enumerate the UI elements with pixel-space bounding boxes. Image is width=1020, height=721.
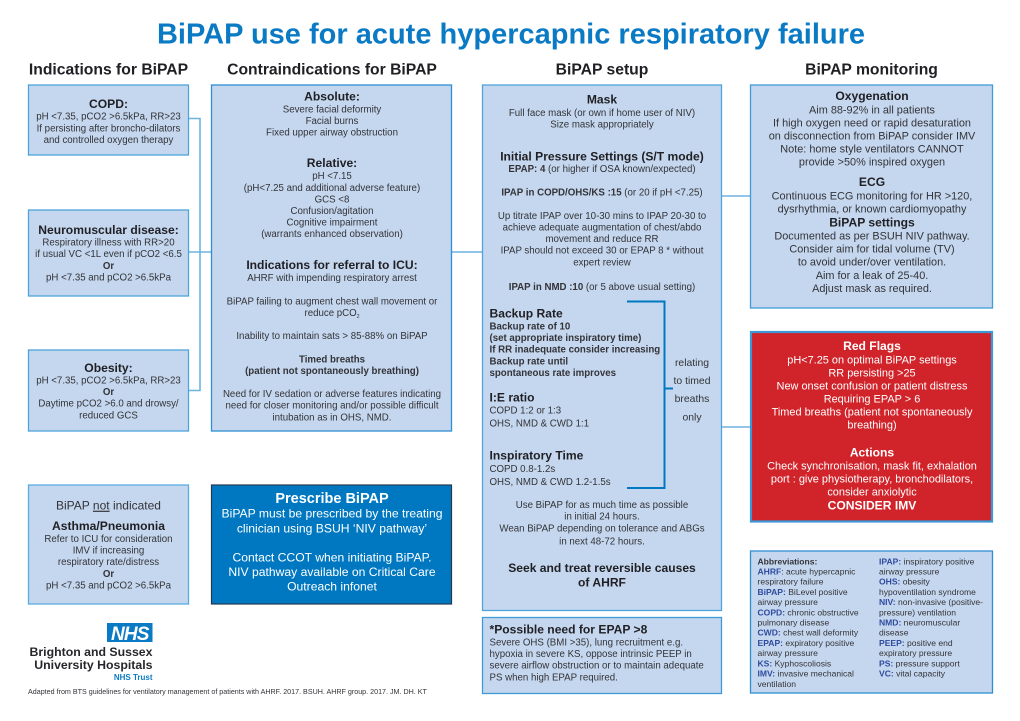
trust name	[30, 645, 153, 682]
abbreviations left column: IMV: invasive mechanical	[758, 668, 854, 678]
panel: possible need for EPAP above 8	[482, 618, 722, 694]
oxygenation: Oxygenation	[835, 89, 909, 103]
initial pressure settings: expert review	[573, 257, 632, 268]
red flags list: RR persisting >25	[828, 368, 916, 380]
initial pressure settings: IPAP in NMD :10 (or 5 above usual setting)	[509, 282, 695, 293]
asthma advice: Or	[103, 569, 114, 580]
bracket note: relating	[675, 358, 709, 369]
connector lines	[189, 118, 750, 427]
prescribe text: NIV pathway available on Critical Care	[228, 565, 436, 579]
abbreviations left column: KS: Kyphoscoliosis	[758, 658, 831, 668]
abbreviations left column: BiPAP: BiLevel positive	[758, 587, 848, 597]
abbreviations left column: COPD: chronic obstructive	[758, 607, 859, 617]
EPAP text: Severe OHS (BMI >35), lung recruitment e.g.	[490, 637, 683, 648]
relative contraindications: (warrants enhanced observation)	[261, 229, 403, 240]
neuromuscular criteria	[35, 238, 182, 284]
duration advice	[499, 500, 705, 547]
asthma heading: Asthma/Pneumonia	[52, 519, 165, 533]
mask settings: Full face mask (or own if home user of NIV)	[509, 108, 695, 119]
initial pressure settings: IPAP should not exceed 30 or EPAP 8 * without	[501, 246, 704, 257]
relative contraindications	[244, 156, 420, 240]
neuromuscular criteria: Respiratory illness with RR>20	[42, 238, 175, 249]
not indicated heading: BiPAP not indicated	[56, 499, 161, 513]
abbreviations right column: disease	[879, 628, 909, 638]
abbreviations left column: ventilation	[758, 679, 796, 689]
inspiratory time	[490, 449, 611, 488]
prescribe text: clinician using BSUH ‘NIV pathway’	[237, 521, 427, 535]
abbreviations right column: PEEP: positive end	[879, 638, 953, 648]
ICU referral indications: Indications for referral to ICU:	[246, 258, 418, 272]
I:E ratio: COPD 1:2 or 1:3	[490, 406, 561, 417]
mask settings: Size mask appropriately	[550, 120, 654, 131]
ICU referral indications: Timed breaths	[299, 354, 365, 366]
neuromuscular heading: Neuromuscular disease:	[38, 223, 179, 237]
ICU referral indications: Need for IV sedation or adverse features indicating	[223, 389, 441, 400]
abbreviations right column: OHS: obesity	[879, 577, 931, 587]
ICU referral indications: 2	[357, 314, 360, 320]
obesity criteria: pH <7.35, pCO2 >6.5kPa, RR>23	[36, 376, 181, 386]
asthma advice: pH <7.35 and pCO2 >6.5kPa	[46, 580, 172, 592]
duration advice: Wean BiPAP depending on tolerance and ABGs	[499, 523, 705, 534]
abbreviations left column: AHRF: acute hypercapnic	[758, 566, 856, 576]
abbreviations left column: airway pressure	[758, 597, 818, 607]
panel: COPD	[28, 85, 188, 155]
obesity heading: Obesity:	[84, 361, 133, 375]
relative contraindications: GCS <8	[315, 194, 349, 206]
relative contraindications: Relative:	[307, 156, 357, 170]
ICU referral indications: AHRF with impending respiratory arrest	[247, 273, 417, 284]
red flags list: Timed breaths (patient not spontaneously	[772, 407, 973, 419]
initial pressure settings: IPAP in COPD/OHS/KS :15 (or 20 if pH <7.25)	[501, 188, 703, 199]
actions list: consider anxiolytic	[827, 486, 917, 498]
asthma advice: respiratory rate/distress	[58, 557, 159, 568]
ECG: dysrhythmia, or known cardiomyopathy	[778, 203, 967, 215]
heading: indications: Indications for BiPAP	[29, 62, 188, 78]
COPD criteria	[36, 112, 181, 146]
source note: Adapted from BTS guidelines for ventilatory management of patients with AHRF. 2017. BSUH. AHRF group. 2017. JM. DH. KT	[28, 688, 428, 696]
abbreviations left column: respiratory failure	[758, 577, 824, 587]
prescribe text: Contact CCOT when initiating BiPAP.	[232, 550, 432, 564]
abbreviations right column: VC: vital capacity	[879, 668, 946, 678]
red flags list: pH<7.25 on optimal BiPAP settings	[787, 354, 957, 366]
EPAP text	[490, 637, 704, 683]
mask settings	[509, 93, 695, 131]
obesity criteria: Daytime pCO2 >6.0 and drowsy/	[38, 399, 179, 410]
abbreviations right column: PS: pressure support	[879, 658, 960, 668]
neuromuscular criteria: pH <7.35 and pCO2 >6.5kPa	[46, 273, 172, 284]
bracket note: breaths	[675, 394, 709, 405]
abbreviations right column: NMD: neuromuscular	[879, 618, 960, 628]
backup rate: If RR inadequate consider increasing	[490, 345, 660, 356]
ICU referral indications: BiPAP failing to augment chest wall movement or	[227, 296, 438, 307]
duration advice: in initial 24 hours.	[564, 512, 640, 523]
abbreviations right column: NIV: non-invasive (positive-	[879, 597, 983, 607]
obesity criteria: reduced GCS	[79, 410, 138, 421]
initial pressure settings: Initial Pressure Settings (S/T mode)	[500, 150, 704, 164]
backup rate: spontaneous rate improves	[490, 368, 616, 379]
ICU referral indications: reduce pCO	[304, 308, 357, 319]
panel: prescribe BiPAP	[212, 485, 452, 604]
panel: abbreviations	[750, 551, 992, 693]
backup rate: (set appropriate inspiratory time)	[490, 333, 641, 344]
asthma advice: Refer to ICU for consideration	[44, 534, 173, 545]
relative contraindications: (pH<7.25 and additional adverse feature)	[244, 183, 420, 194]
BiPAP settings: Consider aim for tidal volume (TV)	[789, 244, 955, 256]
abbreviations left column: Abbreviations:	[758, 556, 817, 566]
duration advice: in next 48-72 hours.	[559, 536, 645, 547]
trust name: NHS Trust	[114, 673, 153, 682]
absolute contraindications: Absolute:	[304, 90, 360, 104]
actions list	[767, 445, 977, 513]
backup rate: Backup Rate	[490, 307, 563, 321]
title: BiPAP use for acute hypercapnic respiratory failure	[157, 18, 865, 50]
duration advice: Use BiPAP for as much time as possible	[516, 500, 688, 511]
red flags list: Red Flags	[843, 339, 901, 353]
ICU referral indications: intubation as in OHS, NMD.	[272, 412, 392, 423]
oxygenation: Aim 88-92% in all patients	[809, 104, 936, 116]
neuromuscular criteria: if usual VC <1L even if pCO2 <6.5	[35, 249, 182, 260]
panel: neuromuscular disease	[28, 210, 188, 296]
reversible causes: of AHRF	[578, 575, 626, 589]
ICU referral indications: need for closer monitoring and/or possible difficult	[225, 401, 439, 412]
asthma advice	[44, 534, 173, 592]
panel: red flags	[751, 332, 992, 522]
absolute contraindications: Severe facial deformity	[283, 104, 381, 116]
ICU referral indications: Inability to maintain sats > 85-88% on BiPAP	[236, 331, 428, 342]
oxygenation: on disconnection from BiPAP consider IMV	[769, 131, 976, 143]
EPAP heading: *Possible need for EPAP >8	[490, 622, 648, 636]
BiPAP settings	[774, 216, 970, 295]
inspiratory time: Inspiratory Time	[490, 449, 584, 463]
panel: contraindications	[212, 85, 452, 431]
abbreviations right column: pressure) ventilation	[879, 607, 956, 617]
trust name: University Hospitals	[34, 658, 153, 672]
prescribe heading: Prescribe BiPAP	[275, 491, 389, 507]
COPD criteria: If persisting after broncho-dilators	[37, 124, 181, 134]
initial pressure settings: achieve adequate augmentation of chest/abdo	[503, 222, 701, 234]
oxygenation: provide >50% inspired oxygen	[799, 157, 945, 169]
inspiratory time: OHS, NMD & CWD 1.2-1.5s	[490, 477, 611, 488]
icon: NHS lozenge: NHS	[111, 624, 150, 645]
panel: obesity	[28, 350, 188, 431]
I:E ratio: OHS, NMD & CWD 1:1	[490, 419, 589, 430]
initial pressure settings: movement and reduce RR	[545, 234, 659, 245]
mask settings: Mask	[587, 93, 617, 107]
reversible causes	[508, 561, 696, 589]
panel: BiPAP not indicated	[28, 485, 188, 604]
EPAP text: hypoxia in severe KS, oppose intrinsic PEEP in	[490, 649, 692, 660]
oxygenation: Note: home style ventilators CANNOT	[780, 144, 964, 156]
initial pressure settings	[498, 150, 706, 293]
ECG: Continuous ECG monitoring for HR >120,	[772, 190, 972, 202]
heading: setup: BiPAP setup	[556, 62, 648, 78]
abbreviations left column: pulmonary disease	[758, 618, 829, 628]
BiPAP settings: BiPAP settings	[829, 216, 915, 230]
inspiratory time: COPD 0.8-1.2s	[490, 464, 555, 475]
initial pressure settings: EPAP: 4 (or higher if OSA known/expected)	[508, 164, 696, 175]
red flags list: Requiring EPAP > 6	[824, 394, 920, 406]
red flags list: breathing)	[847, 420, 897, 432]
abbreviations right column	[879, 556, 983, 678]
abbreviations right column: expiratory pressure	[879, 648, 952, 658]
abbreviations left column	[758, 556, 859, 689]
actions list: Actions	[850, 445, 894, 459]
ICU referral indications	[223, 258, 441, 423]
oxygenation: If high oxygen need or rapid desaturation	[773, 118, 971, 130]
BiPAP settings: to avoid under/over ventilation.	[798, 257, 946, 269]
BiPAP settings: Adjust mask as required.	[812, 283, 932, 295]
COPD heading: COPD:	[89, 97, 128, 111]
abbreviations left column: CWD: chest wall deformity	[758, 628, 859, 638]
abbreviations left column: EPAP: expiratory positive	[758, 638, 855, 648]
prescribe text	[222, 507, 442, 593]
abbreviations right column: IPAP: inspiratory positive	[879, 556, 975, 566]
COPD criteria: and controlled oxygen therapy	[44, 135, 174, 146]
oxygenation	[769, 89, 976, 169]
absolute contraindications: Facial burns	[306, 116, 359, 127]
I:E ratio	[490, 391, 589, 430]
actions list: Check synchronisation, mask fit, exhalation	[767, 460, 977, 472]
relative contraindications: Cognitive impairment	[286, 218, 378, 228]
red flags list: New onset confusion or patient distress	[777, 381, 968, 393]
bracket	[627, 302, 673, 488]
trust name: Brighton and Sussex	[30, 645, 153, 659]
COPD criteria: pH <7.35, pCO2 >6.5kPa, RR>23	[36, 112, 181, 123]
relative contraindications: pH <7.15	[312, 171, 352, 182]
I:E ratio: I:E ratio	[490, 391, 535, 405]
heading: contraindications: Contraindications for BiPAP	[227, 62, 437, 78]
NHS trust logo	[30, 623, 153, 682]
panel: BiPAP setup	[482, 85, 722, 610]
obesity criteria: Or	[103, 387, 114, 398]
bracket note: only	[682, 412, 702, 423]
actions list: CONSIDER IMV	[828, 499, 916, 513]
bracket note	[674, 358, 711, 423]
EPAP text: severe airflow obstruction or to maintain adequate	[490, 661, 704, 672]
ECG: ECG	[859, 175, 885, 189]
red flags list	[772, 339, 973, 432]
reversible causes: Seek and treat reversible causes	[508, 561, 696, 575]
initial pressure settings: Up titrate IPAP over 10-30 mins to IPAP 20-30 to	[498, 211, 706, 222]
EPAP text: PS when high EPAP required.	[490, 672, 618, 683]
panel: BiPAP monitoring	[750, 85, 992, 308]
backup rate	[490, 307, 660, 379]
backup rate: Backup rate until	[490, 356, 568, 367]
obesity criteria	[36, 376, 181, 421]
prescribe text: Outreach infonet	[287, 579, 378, 593]
prescribe text: BiPAP must be prescribed by the treating	[222, 507, 442, 521]
abbreviations right column: hypoventilation syndrome	[879, 587, 976, 597]
neuromuscular criteria: Or	[103, 261, 114, 272]
actions list: port : give physiotherapy, bronchodilators,	[771, 473, 973, 485]
relative contraindications: Confusion/agitation	[291, 206, 373, 217]
asthma advice: IMV if increasing	[73, 546, 144, 556]
BiPAP settings: Aim for a leak of 25-40.	[816, 270, 928, 282]
heading: monitoring: BiPAP monitoring	[805, 62, 938, 78]
absolute contraindications: Fixed upper airway obstruction	[266, 128, 398, 138]
absolute contraindications	[266, 90, 398, 138]
ECG	[772, 175, 972, 215]
abbreviations right column: airway pressure	[879, 566, 940, 576]
bracket note: to timed	[674, 376, 711, 387]
abbreviations left column: airway pressure	[758, 648, 818, 658]
ICU referral indications: (patient not spontaneously breathing)	[245, 366, 419, 377]
backup rate: Backup rate of 10	[490, 322, 570, 332]
BiPAP settings: Documented as per BSUH NIV pathway.	[774, 231, 970, 243]
